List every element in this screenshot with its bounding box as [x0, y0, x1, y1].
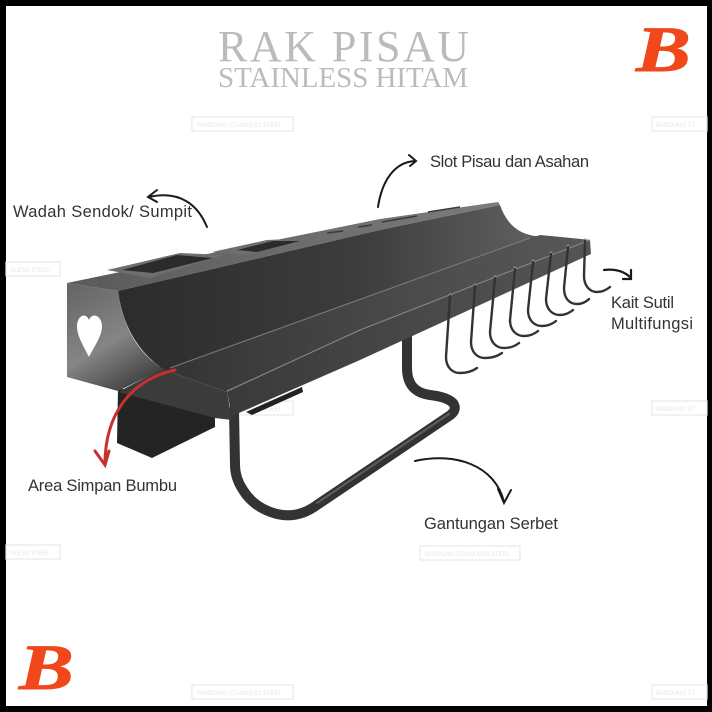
rack under strip	[246, 387, 303, 415]
rack lip	[227, 240, 591, 416]
towel bar	[234, 335, 455, 515]
label: Kait Sutil Multifungsi: Multifungsi	[611, 315, 693, 333]
watermarks: BANDUNG STAINLESS STEEL	[197, 123, 283, 129]
watermarks: BANDUNG ST	[656, 691, 696, 697]
watermarks: NLESS STEEL	[10, 268, 51, 274]
rack lower front	[118, 369, 232, 420]
arrow: Area Simpan (red)	[95, 370, 175, 465]
watermarks: BANDUNG STAINLESS STEEL	[197, 407, 283, 413]
storage block	[117, 388, 215, 458]
label: Wadah Sendok/ Sumpit: Wadah Sendok/ Sumpit	[13, 203, 192, 221]
logo: bottom left: B	[18, 631, 74, 703]
icon: heart cutout	[77, 316, 102, 357]
rack tray floor	[165, 235, 590, 392]
rack side panel	[67, 283, 163, 391]
spoon holder 1	[107, 253, 225, 278]
watermarks: BANDUNG ST	[656, 123, 696, 129]
label: Area Simpan Bumbu: Area Simpan Bumbu	[28, 477, 177, 495]
title	[218, 22, 469, 94]
watermarks: NLESS STEEL	[10, 551, 51, 557]
spoon holder 2	[212, 238, 313, 255]
rack	[67, 202, 591, 420]
rack bend line	[170, 238, 530, 368]
label: Gantungan Serbet: Gantungan Serbet	[424, 515, 558, 533]
title: STAINLESS HITAM	[218, 62, 468, 94]
arrow: Gantungan Serbet	[415, 458, 511, 503]
arrow: Slot Pisau	[378, 155, 416, 207]
label: Slot Pisau dan Asahan: Slot Pisau dan Asahan	[430, 153, 589, 171]
arrow: Wadah Sendok	[148, 190, 207, 227]
label: Kait Sutil Multifungsi	[611, 294, 693, 333]
hooks	[446, 238, 610, 373]
arrow: Kait Sutil	[604, 270, 631, 279]
watermarks: BANDUNG STAINLESS STEEL	[425, 552, 511, 558]
watermarks: BANDUNG ST	[656, 407, 696, 413]
watermarks: BANDUNG STAINLESS STEEL	[197, 691, 283, 697]
logo: top right: B	[635, 13, 691, 85]
title: RAK PISAU	[218, 22, 469, 71]
knife slots	[327, 207, 460, 233]
rack back wall	[118, 205, 590, 372]
label: Kait Sutil Multifungsi: Kait Sutil	[611, 294, 674, 312]
rack top face	[67, 202, 500, 291]
